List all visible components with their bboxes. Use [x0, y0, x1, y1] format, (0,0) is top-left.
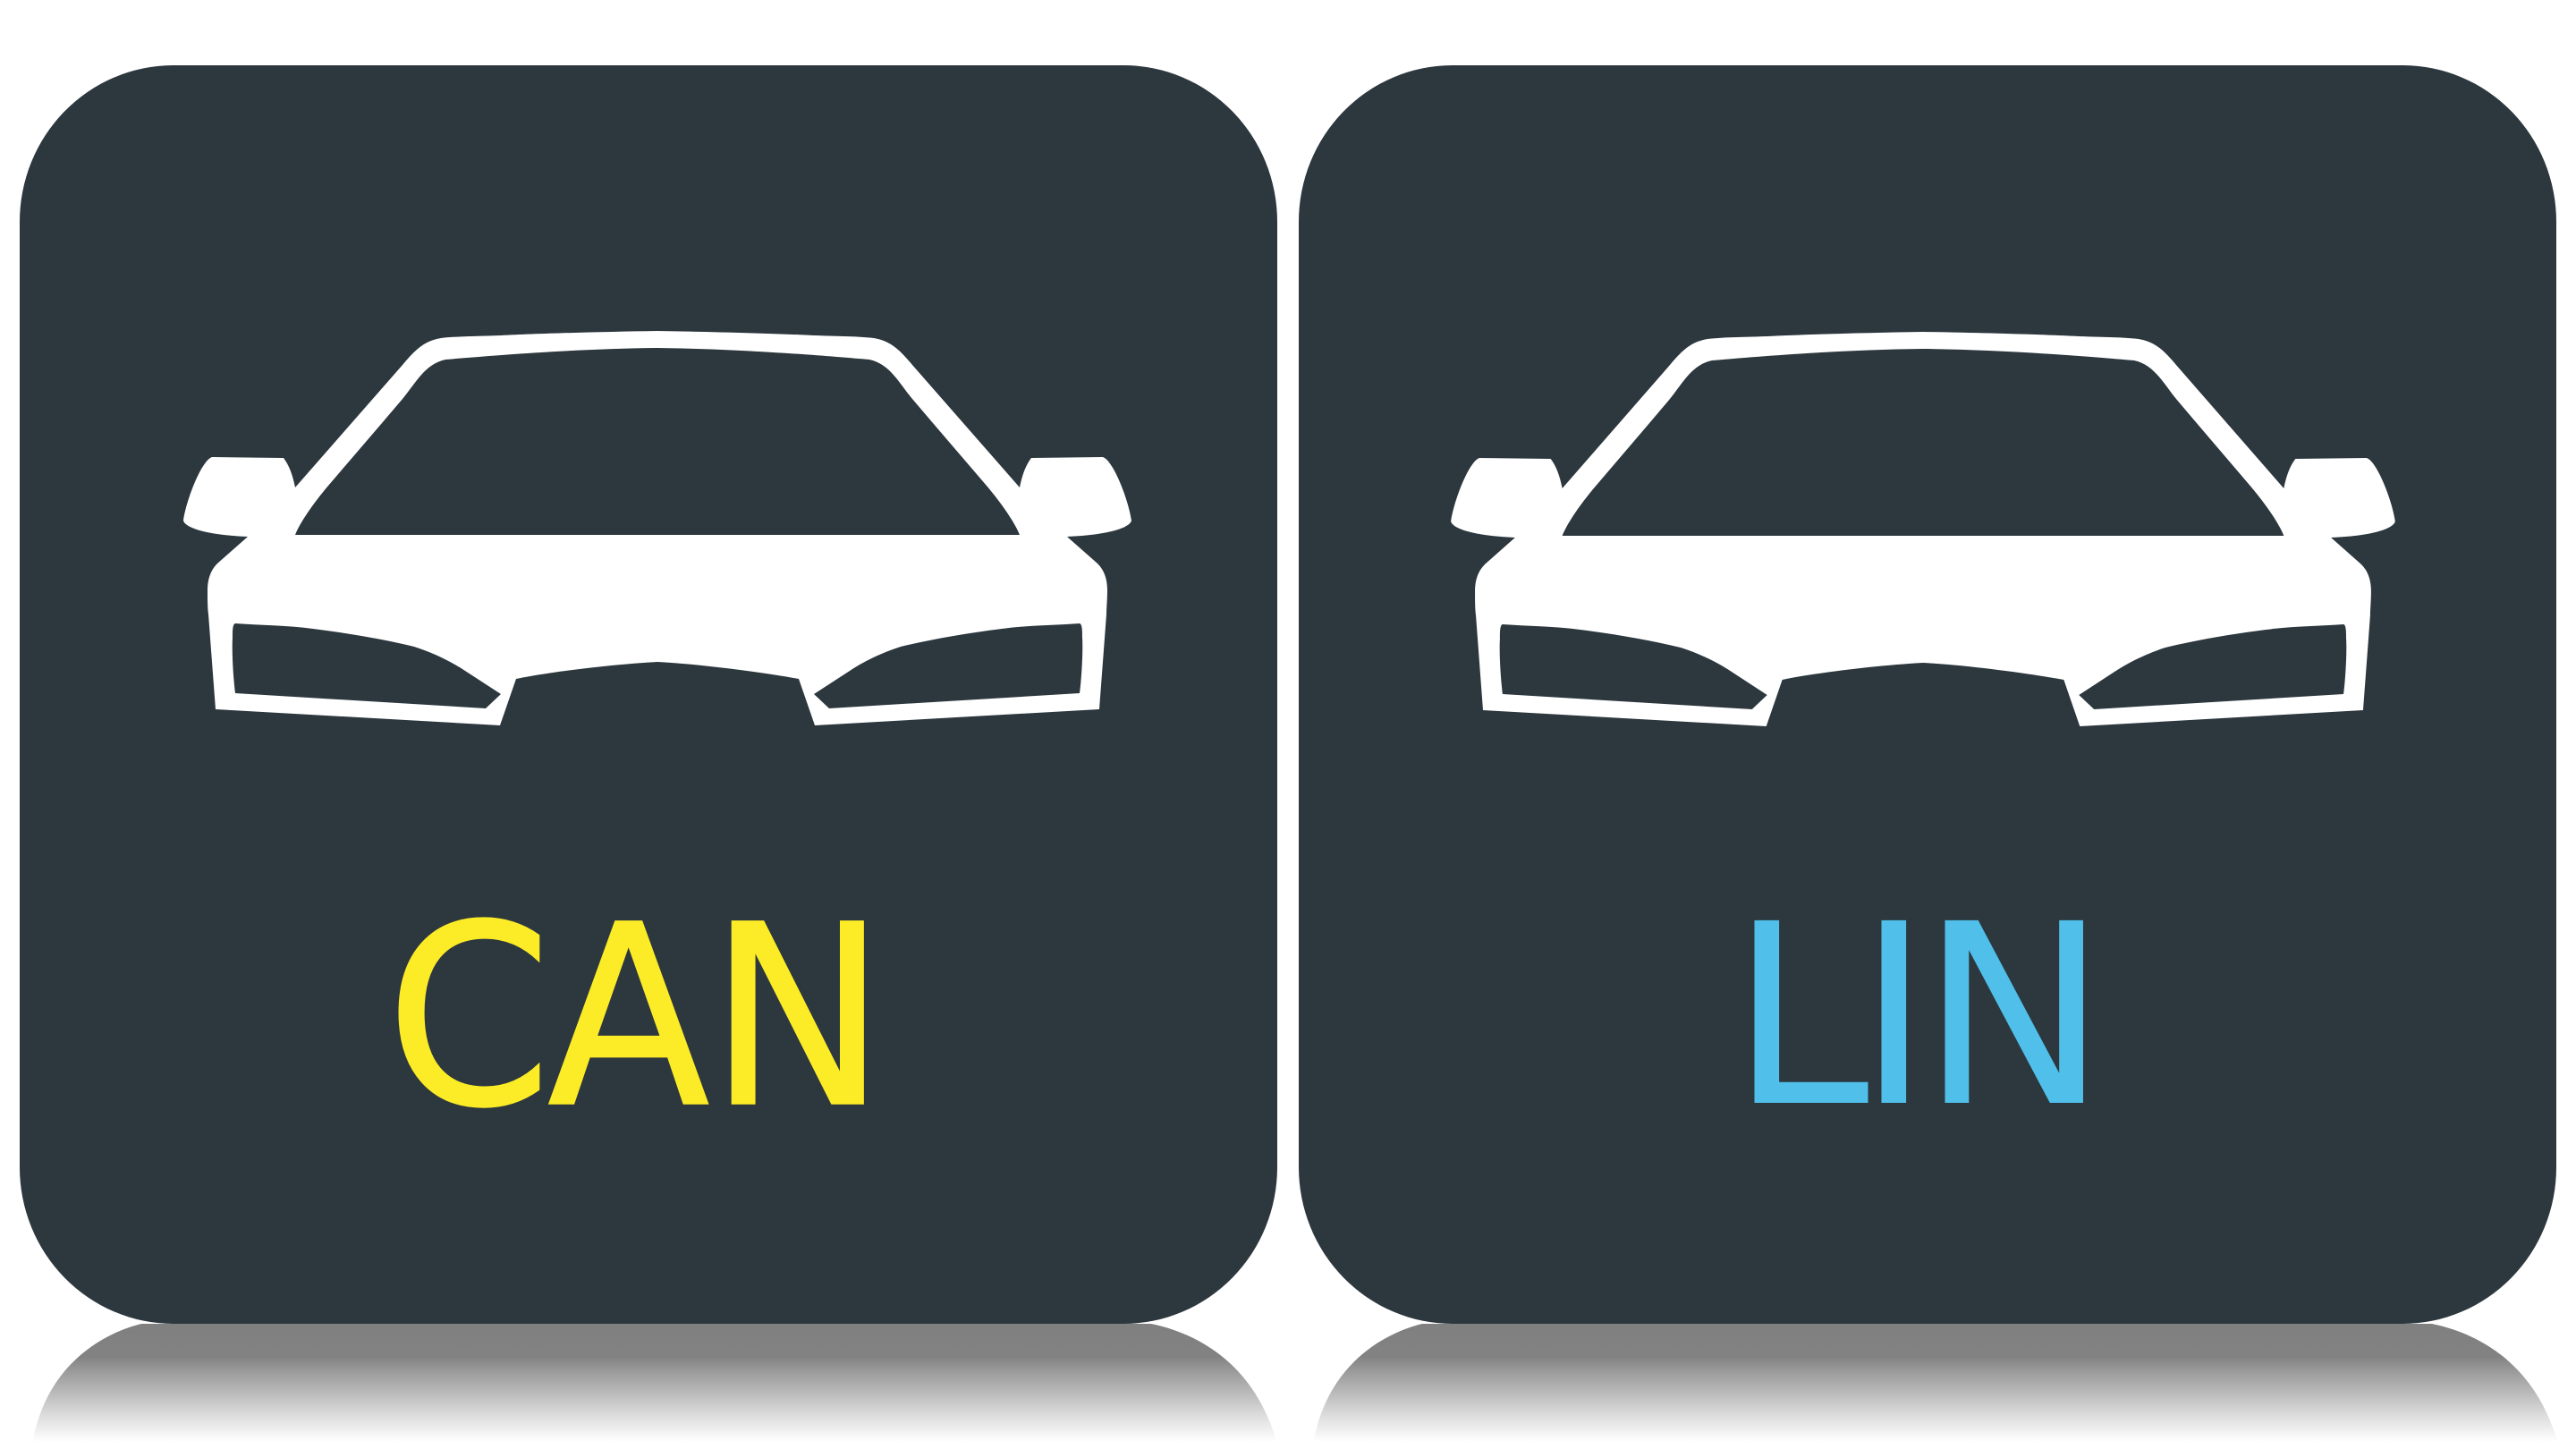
reflection: LIN tile — [1313, 1324, 2558, 1445]
icon: car front LIN — [1451, 332, 2395, 726]
panel background: CAN — [20, 65, 1277, 1324]
reflection: CAN tile — [32, 1324, 1277, 1445]
panel: LIN — [1299, 65, 2556, 1324]
label: LIN: LIN — [1730, 871, 2107, 1163]
panel background: LIN — [1299, 65, 2556, 1324]
panel: CAN — [20, 65, 1277, 1324]
label: CAN: CAN — [386, 873, 886, 1164]
icon: car front CAN — [183, 331, 1131, 725]
